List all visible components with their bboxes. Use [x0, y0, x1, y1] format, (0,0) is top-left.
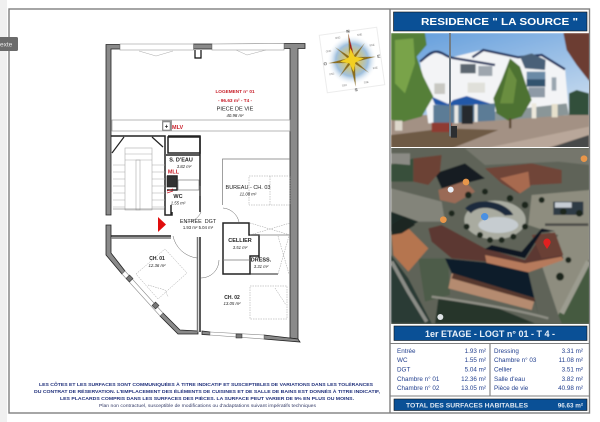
orange block left: [392, 225, 428, 272]
room labels: CH. 01: [149, 256, 165, 262]
apartment label: LOGEMENT n° 01: [215, 89, 255, 94]
right column: Pièce de vie: [494, 385, 529, 392]
parasols: [432, 96, 492, 105]
surfaces table: [397, 348, 583, 392]
right overhang: [563, 33, 590, 82]
room labels: DRESS.: [251, 258, 272, 264]
apartment label: [215, 89, 255, 103]
right column: 11.08 m²: [559, 357, 583, 364]
compass rose: N: [346, 29, 350, 34]
room labels: CH. 02: [224, 295, 240, 301]
left tree: [391, 33, 433, 122]
room labels: CELLIER: [228, 238, 252, 244]
stairs: [113, 148, 165, 210]
compass rose: [319, 25, 385, 96]
compass rose: ESE: [373, 66, 378, 70]
aerial map: [391, 147, 590, 325]
compass rose: SSE: [364, 81, 369, 85]
red marks: [167, 189, 173, 193]
MLV cupboard: [112, 120, 290, 131]
left column: 13.05 m²: [461, 385, 486, 392]
room labels: 1.93 m² 5.04 m²: [183, 225, 214, 230]
red entrance arrow: [158, 217, 166, 232]
title banner: RESIDENCE " LA SOURCE ": [421, 16, 578, 28]
exterior walls: [106, 44, 305, 342]
right column: [494, 348, 583, 392]
legal notice: DU CONTRAT DE RÉSERVATION. L'EMPLACEMENT DES ÉLÉMENTS DE CUISINES ET DE SALLE DE BAINS EST DONNÉS À TITRE INDICATIF,: [34, 387, 380, 394]
room labels: MLL: [168, 170, 180, 176]
right column: 3.82 m²: [562, 376, 583, 383]
light ground: [528, 190, 590, 315]
sink: [178, 180, 199, 190]
window details: [126, 275, 242, 338]
total banner: [394, 399, 587, 410]
map pins: [437, 155, 587, 320]
building body: [420, 50, 569, 123]
compass rose: NNE: [357, 33, 363, 37]
room labels: 12.36 m²: [149, 263, 166, 268]
right column: Chambre n° 03: [494, 356, 537, 364]
room labels: 3.82 m²: [177, 164, 192, 169]
dashed furniture: [136, 176, 290, 319]
left column: 12.36 m²: [461, 376, 486, 383]
background trees: [569, 90, 589, 115]
tooltip fragment: [0, 37, 18, 51]
page edge strip: [0, 0, 7, 422]
compass rose: O: [323, 61, 328, 66]
long building: [428, 224, 564, 264]
tree row: [449, 189, 583, 281]
left column: 5.04 m²: [465, 367, 486, 374]
right column: 3.31 m²: [562, 348, 583, 355]
right column: Dressing: [494, 348, 519, 355]
light partitions: [222, 159, 290, 260]
shadows: [444, 258, 536, 302]
roof edges: [420, 52, 495, 65]
right column: Salle d'eau: [494, 376, 525, 383]
left column: Chambre n° 02: [397, 384, 440, 392]
left column: Chambre n° 01: [397, 375, 440, 383]
lower block: [448, 273, 535, 310]
dark vegetation: [435, 163, 485, 188]
tooltip fragment: exte: [0, 42, 13, 48]
right column: 3.51 m²: [562, 367, 583, 374]
legal notice: LES PLACARDS COMPRIS DANS LES SURFACES DES PIÈCES. LA SURFACE PEUT VARIER DE 5% EN PLUS OU MOINS.: [60, 394, 354, 401]
parking: [553, 202, 583, 215]
room labels: WC: [173, 194, 183, 200]
roads: [392, 262, 427, 322]
compass rose: S: [354, 87, 358, 92]
middle tree: [493, 58, 532, 121]
MLV cupboard: +: [165, 124, 169, 130]
left column: WC: [397, 357, 408, 364]
compass rose: ENE: [370, 44, 375, 47]
table frame: [390, 344, 589, 396]
lot banner: [394, 326, 587, 340]
building photo: [391, 33, 590, 148]
compass rose: OSO: [329, 73, 335, 76]
total banner: 96.63 m²: [558, 402, 583, 410]
compass rose: E: [377, 54, 381, 59]
room labels: 1.55 m²: [171, 200, 186, 206]
right column: 40.98 m²: [558, 385, 583, 392]
ground: [391, 115, 590, 148]
interior walls: [111, 136, 278, 332]
lot banner: 1er ETAGE - LOGT n° 01 - T 4 -: [425, 329, 555, 339]
room labels: 3.51 m²: [233, 245, 248, 250]
compass rose: NNO: [335, 36, 341, 40]
title banner: [394, 12, 587, 31]
legal notice: LES CÔTES ET LES SURFACES SONT COMMUNIQUÉES À TITRE INDICATIF ET SUSCEPTIBLES DE VARIATIONS DANS LES TOLÉRANCES: [39, 380, 373, 387]
room labels: PIECE DE VIE: [217, 106, 254, 112]
apartment label: - 96.63 m² - T4 -: [218, 98, 253, 103]
terrace: [432, 123, 452, 132]
left column: 1.93 m²: [465, 348, 486, 355]
left column: DGT: [397, 367, 410, 374]
left column: 1.55 m²: [465, 357, 486, 364]
room labels: 40.98 m²: [227, 113, 244, 118]
room labels: S. D'EAU: [169, 158, 193, 164]
door arcs: [173, 186, 239, 278]
total banner: TOTAL DES SURFACES HABITABLES: [406, 402, 528, 410]
compass rose: SSO: [342, 84, 347, 88]
right column: Cellier: [494, 367, 512, 374]
plaza: [464, 201, 526, 239]
floor plan: [106, 44, 305, 342]
left column: Entrée: [397, 348, 416, 355]
legal notice: Plan non contractuel, susceptible de modifications ou d'adaptations suivant impératifs techniques: [99, 403, 317, 408]
room labels: [149, 89, 272, 306]
compass rose: ONO: [326, 50, 332, 54]
MLV cupboard: MLV: [172, 125, 184, 131]
room labels: 11.08 m²: [240, 192, 257, 196]
room labels: ENTREE DGT: [180, 219, 217, 225]
roofs top: [485, 163, 562, 193]
legal notice: [34, 380, 380, 408]
left column: [397, 348, 486, 392]
room labels: BUREAU - CH. 03: [226, 185, 270, 191]
shop front: [433, 103, 495, 124]
windows: [460, 64, 476, 73]
windows: [120, 44, 284, 339]
room labels: 3.31 m²: [254, 264, 269, 269]
room labels: 13.05 m²: [224, 301, 241, 306]
